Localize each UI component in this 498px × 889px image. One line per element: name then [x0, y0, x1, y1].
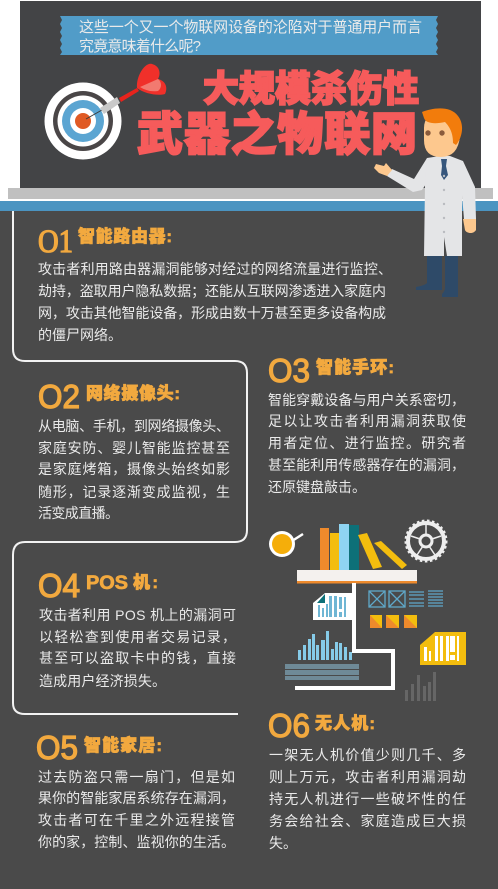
body 06: 则上万元，攻击者利用漏洞劫	[269, 769, 466, 785]
heading 04: POS	[86, 573, 128, 594]
number 02: O2	[38, 378, 80, 415]
board tray	[8, 188, 493, 199]
body 02: 活变成直播。	[38, 505, 119, 521]
wireframe icons	[369, 591, 443, 607]
body 01	[38, 261, 392, 343]
icon: target with dart	[44, 64, 166, 160]
number 03: O3	[268, 352, 310, 389]
illustration: presenter	[374, 108, 476, 297]
section 03: smart band	[268, 352, 466, 495]
heading 04: 机:	[133, 572, 158, 592]
body 02	[38, 418, 230, 521]
body 04: 攻击者利用 POS 机上的漏洞可	[39, 607, 236, 623]
body 06	[269, 747, 466, 851]
intro banner	[60, 16, 438, 55]
body 04	[39, 607, 236, 689]
section 05: smart home	[36, 729, 235, 850]
heading 06: 无人机:	[315, 713, 375, 733]
title: 大规模杀伤性	[203, 60, 419, 112]
title	[137, 60, 419, 164]
body 03: 甚至能利用传感器存在的漏洞，	[268, 457, 465, 473]
body 02: 家庭安防、婴儿智能监控甚至	[38, 440, 230, 456]
icon: coffee cup	[269, 531, 303, 557]
blue band	[0, 201, 498, 211]
body 06: 务会给社会、家庭造成巨大损	[269, 813, 466, 829]
orange squares	[370, 615, 417, 628]
heading 05: 智能家居:	[84, 735, 162, 755]
body 04: 甚至可以盗取卡中的钱，直接	[39, 650, 236, 666]
body 06: 一架无人机价值少则几千、多	[269, 747, 466, 763]
body 01: 的僵尸网络。	[38, 327, 122, 343]
body 03: 还原键盘敲击。	[268, 479, 366, 495]
body 05: 你的家，控制、监视你的生活。	[38, 834, 235, 850]
heading 04	[86, 572, 158, 594]
number 04: O4	[38, 567, 80, 604]
body 02: 随形，记录逐渐变成监视，生	[38, 484, 230, 500]
yellow data card	[420, 632, 466, 665]
intro banner: 究竟意味着什么呢?	[79, 37, 201, 55]
body 03: 用者定位、进行监控。研究者	[268, 435, 466, 451]
icon: gear	[406, 521, 446, 561]
number 06: O6	[268, 707, 310, 744]
blue bar chart	[298, 631, 352, 660]
section 04: POS	[38, 567, 236, 689]
body 05: 果你的智能家居系统存在漏洞，	[38, 790, 235, 806]
title: 武器之物联网	[137, 98, 417, 164]
intro banner: 这些一个又一个物联网设备的沦陷对于普通用户而言	[79, 19, 422, 36]
body 04: 以轻松查到使用者交易记录，	[39, 629, 236, 645]
body 03: 足以让攻击者利用漏洞获取使	[268, 413, 466, 429]
connecting path	[295, 583, 393, 688]
illustration: books and data charts	[269, 521, 466, 701]
body 02: 是家庭烤箱，摄像头始终如影	[38, 461, 230, 477]
chalkboard header	[20, 1, 481, 188]
body 06: 持无人机进行一些破坏性的任	[269, 791, 466, 807]
heading 01: 智能路由器:	[78, 226, 172, 246]
body 06: 失。	[269, 835, 297, 851]
body 01: 攻击者利用路由器漏洞能够对经过的网络流量进行监控、	[38, 261, 392, 277]
body 02: 从电脑、手机，到网络摄像头、	[38, 418, 230, 434]
heading 02: 网络摄像头:	[86, 383, 180, 403]
number 05: O5	[36, 729, 78, 766]
body 03	[268, 392, 466, 495]
section 02: network camera	[38, 378, 230, 521]
body 01: 劫持，盗取用户隐私数据；还能从互联网渗透进入家庭内	[38, 283, 386, 300]
body 05: 过去防盗只需一扇门，但是如	[38, 769, 235, 785]
body 05: 攻击者可在千里之外远程接管	[38, 812, 235, 828]
section connector line	[13, 211, 247, 714]
body 03: 智能穿戴设备与用户关系密切，	[268, 392, 465, 408]
icon: books	[320, 524, 407, 570]
heading 03: 智能手环:	[316, 357, 394, 377]
section 06: drone	[268, 707, 466, 851]
body 04: 造成用户经济损失。	[39, 673, 166, 689]
blue data card	[313, 593, 352, 620]
data strip	[285, 664, 359, 680]
body 01: 网，攻击其他智能设备，形成由数十万甚至更多设备构成	[38, 305, 386, 321]
body 05	[38, 769, 235, 850]
section 01: smart router	[38, 224, 392, 343]
shelf	[297, 570, 417, 584]
number 01: O1	[38, 224, 73, 260]
grey bar chart	[405, 672, 436, 701]
